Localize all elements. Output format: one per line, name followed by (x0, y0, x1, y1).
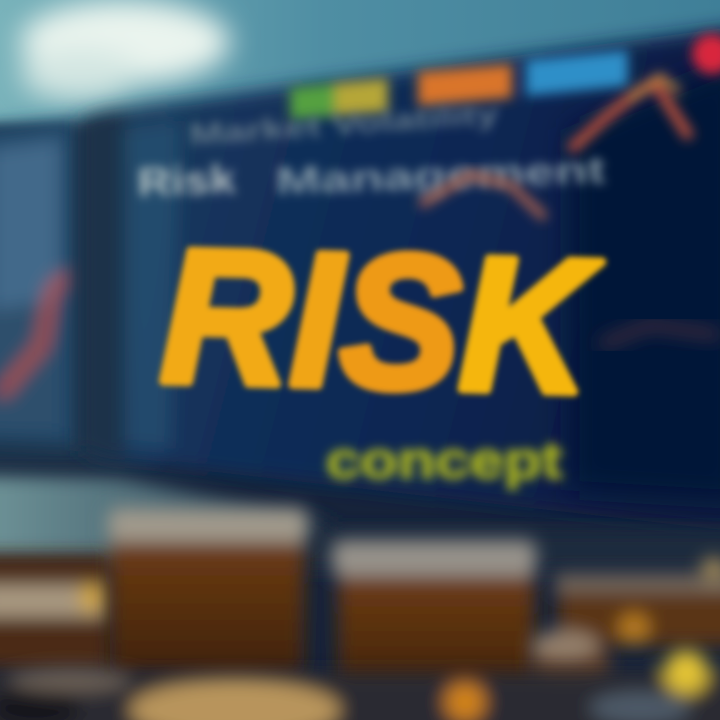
lower backdrop (0, 220, 720, 720)
blurred board headline text: Management (275, 149, 607, 203)
concept subtitle: concept (326, 432, 562, 490)
blurred board headline text: Risk (137, 158, 237, 205)
gap between screens (0, 125, 160, 465)
blurred board headline text (137, 97, 607, 205)
centre-left beer glass (108, 508, 308, 675)
mid chart arc (420, 175, 545, 218)
blurred board headline text: Market Volatility (188, 97, 500, 152)
right beer glass (530, 574, 720, 699)
main board (78, 26, 720, 532)
board right dark chart area (570, 60, 720, 500)
bottom foreground and bokeh lights (0, 557, 720, 720)
cloud (20, 0, 230, 101)
left screen (0, 118, 78, 445)
top coloured tabs (290, 34, 720, 120)
left table surface (0, 475, 720, 570)
top right chart line (570, 76, 690, 150)
centre beer glass (332, 540, 536, 695)
left beer glass (0, 555, 110, 670)
RISK headline: RISK (159, 210, 603, 433)
left screen chart line (0, 275, 68, 395)
sky background (0, 0, 720, 230)
right faint chart arc (600, 325, 720, 345)
